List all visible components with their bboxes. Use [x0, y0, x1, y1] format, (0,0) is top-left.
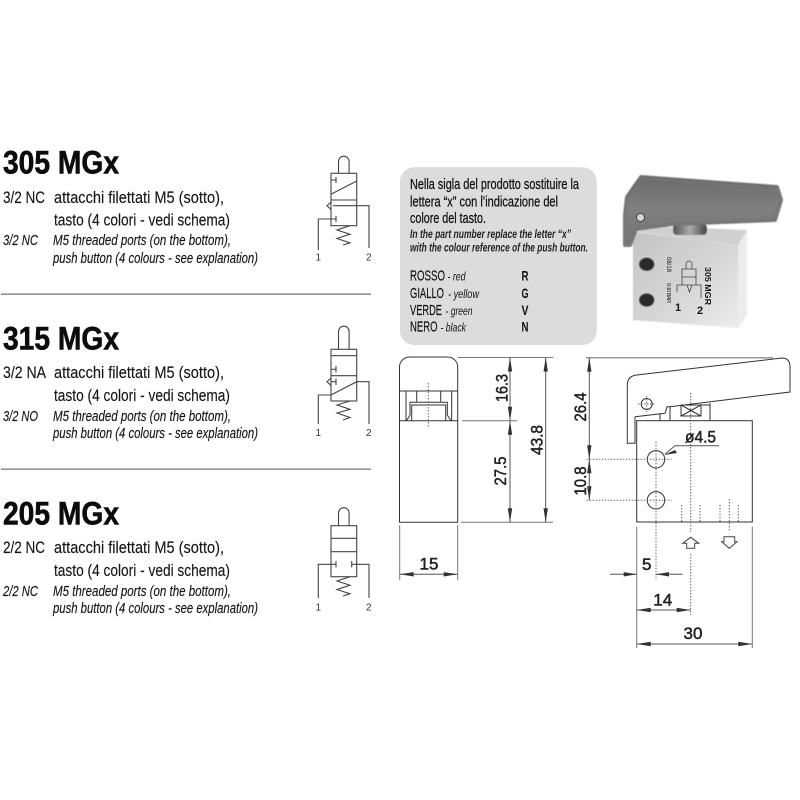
photo: 305 MGR valve: 305 MGR [703, 267, 712, 305]
text block: English note: with the colour reference of the push button. [410, 240, 588, 254]
text block: English description: M5 threaded ports (on the bottom), [53, 408, 231, 425]
dimension: 26.4: 26.4 [571, 392, 590, 422]
text block: Italian description: attacchi filettati M5 (sotto), [54, 188, 224, 207]
text block: Italian note: colore del tasto. [410, 211, 486, 227]
photo: 305 MGR valve: 08/18 [665, 257, 671, 273]
text block: English note: In the part number replace the letter “x” [410, 227, 571, 241]
text block: English description [3, 408, 258, 442]
list: colour codes: G [522, 285, 529, 301]
list: colour codes: - black [440, 320, 467, 334]
icon: 315 valve symbol [316, 326, 372, 439]
divider [1, 468, 371, 470]
dimension: ø4.5: ø4.5 [685, 427, 716, 446]
list: colour codes: - yellow [448, 287, 480, 301]
dimension: 43.8: 43.8 [528, 425, 546, 455]
text block: Italian description [3, 538, 230, 580]
drawing: front view [400, 357, 553, 580]
text block: Italian note: Nella sigla del prodotto sostituire la [410, 177, 580, 193]
text block: English description: M5 threaded ports (on the bottom), [53, 583, 231, 600]
section: 305 MGx [3, 144, 372, 267]
heading: 305 MGx: 305 MGx [3, 144, 119, 180]
text block: Italian note [410, 177, 580, 227]
list: colour codes: GIALLO [410, 285, 444, 302]
panel: colour code [400, 167, 597, 345]
dimension: 15: 15 [420, 554, 438, 574]
text block: Italian description: 3/2 NA [3, 363, 47, 382]
dimension: 30: 30 [684, 624, 702, 643]
photo: 305 MGR valve [625, 177, 781, 328]
text block: Italian description: tasto (4 colori - vedi schema) [54, 210, 230, 230]
text block: English description [2, 583, 258, 617]
section: 205 MGx [2, 496, 372, 617]
text block: English description [3, 232, 258, 267]
text block: Italian description [3, 188, 230, 230]
icon: 305 valve symbol: 1 [316, 252, 322, 264]
text block: English description: 2/2 NC [2, 583, 38, 600]
drawing: side view [571, 357, 790, 648]
list: colour codes: NERO [410, 318, 438, 336]
text block: English description: 3/2 NC [3, 232, 38, 249]
text block: Italian description: 3/2 NC [3, 188, 45, 207]
icon: 305 valve symbol: 2 [366, 252, 372, 264]
text block: Italian description: attacchi filettati M5 (sotto), [54, 538, 224, 557]
text block: Italian description: tasto (4 colori - vedi schema) [54, 386, 230, 405]
heading: 205 MGx: 205 MGx [3, 496, 119, 532]
text block: Italian description: tasto (4 colori - vedi schema) [54, 561, 230, 580]
list: colour codes: R [522, 268, 528, 284]
icon: 315 valve symbol: 1 [316, 428, 322, 439]
icon: 205 valve symbol: 2 [366, 602, 372, 614]
heading: 315 MGx: 315 MGx [3, 320, 119, 356]
icon: 315 valve symbol: 2 [366, 428, 372, 439]
text block: Italian note: lettera “x” con l’indicazione del [410, 194, 558, 210]
dimension: 27.5: 27.5 [491, 456, 510, 486]
list: colour codes: - green [446, 304, 473, 318]
divider [1, 294, 371, 295]
text block: English description: 3/2 NO [3, 408, 38, 425]
arrow: down [722, 537, 737, 548]
icon: 205 valve symbol [316, 508, 372, 614]
dimension: 14: 14 [653, 591, 672, 610]
dimension: 10.8: 10.8 [571, 466, 590, 496]
text block: Italian description: 2/2 NC [3, 538, 45, 557]
arrow: up [683, 537, 699, 548]
list: colour codes: - red [448, 270, 466, 284]
list: colour codes [410, 268, 529, 336]
icon: 205 valve symbol: 1 [316, 602, 322, 614]
text block: Italian description [3, 363, 230, 405]
photo: 305 MGR valve: 0-10 BAR [665, 283, 671, 303]
dimension: 5: 5 [642, 555, 651, 574]
list: colour codes: ROSSO [410, 268, 445, 284]
text block: Italian description: attacchi filettati M5 (sotto), [54, 363, 224, 382]
dimension: 16.3: 16.3 [492, 374, 512, 402]
section: 315 MGx [3, 320, 372, 442]
text block: English description: push button (4 colours - see explanation) [52, 250, 258, 267]
lever [627, 358, 790, 443]
text block: English note [410, 227, 588, 254]
list: colour codes: N [522, 318, 528, 334]
photo: 305 MGR valve: 1 [675, 302, 681, 314]
text block: English description: M5 threaded ports (on the bottom), [53, 232, 231, 249]
list: colour codes: V [522, 302, 529, 318]
text block: English description: push button (4 colours - see explanation) [52, 600, 258, 617]
photo: 305 MGR valve: 2 [697, 305, 703, 317]
text block: English description: push button (4 colours - see explanation) [52, 425, 258, 442]
icon: 305 valve symbol [316, 156, 372, 264]
list: colour codes: VERDE [410, 302, 442, 319]
